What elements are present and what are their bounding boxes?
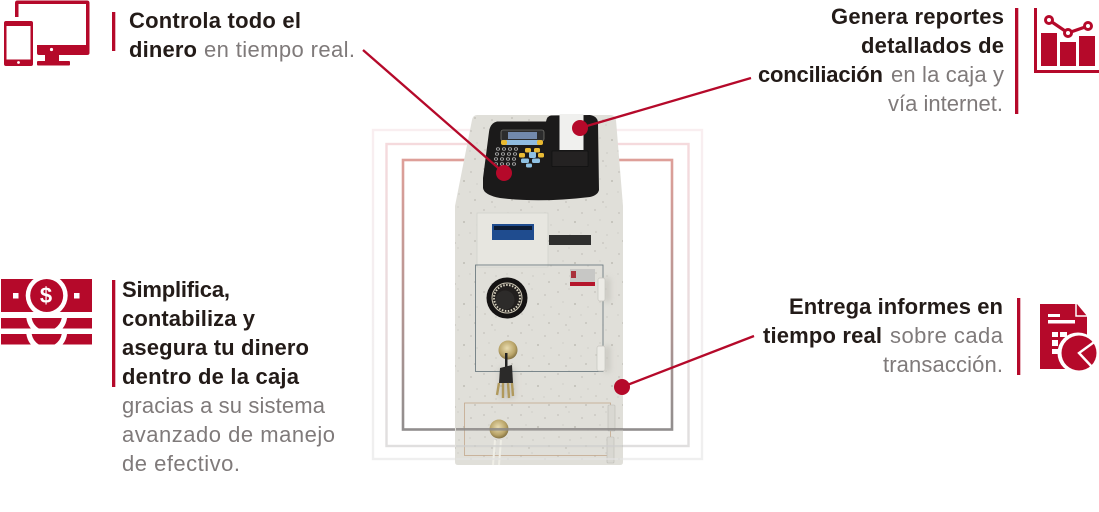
function keys [501, 140, 543, 145]
safe body [455, 115, 623, 465]
door hinges [597, 278, 605, 371]
numeric keypad [494, 148, 518, 165]
text: real-time reports: sobre cada [890, 323, 1004, 348]
decorative nested frames behind the safe [373, 130, 702, 459]
printer terminal [483, 114, 599, 200]
callout line: terminal [363, 50, 512, 181]
text: real-time reports: transacción. [883, 352, 1003, 377]
bill slot [492, 224, 534, 240]
icon: cash: $ [40, 283, 52, 308]
icon: document with pie [1040, 304, 1098, 374]
printer recess [552, 151, 588, 166]
text: cash handling: contabiliza y [122, 306, 256, 331]
terminal screen [501, 130, 544, 141]
door lock with keys [497, 340, 518, 398]
cash drawer [464, 403, 610, 456]
text: reports: vía internet. [888, 91, 1003, 116]
accent bar: cash [112, 280, 115, 387]
text: cash handling [122, 277, 335, 476]
text: reports: en la caja y [891, 62, 1004, 87]
icon: devices [4, 0, 90, 66]
text: cash handling: Simplifica, [122, 277, 230, 302]
safe door [476, 265, 603, 372]
text: reports [758, 4, 1004, 116]
frame lines crossing in front of the safe [456, 428, 623, 460]
icon: report chart [1034, 8, 1099, 73]
accent bar: reports [1015, 8, 1018, 114]
drawer hinges [607, 405, 615, 463]
text: control: Controla todo el [129, 8, 301, 33]
text: control [129, 8, 355, 62]
text: control: en tiempo real. [204, 37, 355, 62]
drawer lock with key [490, 420, 508, 465]
text: cash handling: avanzado de manejo [122, 422, 335, 447]
combination dial [486, 278, 528, 318]
accent bar: informs [1017, 298, 1020, 375]
text: cash handling: gracias a su sistema [122, 393, 326, 418]
text: real-time reports: tiempo real [763, 323, 882, 348]
receipt slot [549, 235, 591, 245]
text: reports: conciliación [758, 62, 883, 87]
text: cash handling: asegura tu dinero [122, 335, 309, 360]
icon: cash [1, 279, 92, 344]
callout line: printer [572, 78, 751, 136]
upper front panel [477, 213, 548, 267]
text: cash handling: de efectivo. [122, 451, 240, 476]
text: control: dinero [129, 37, 197, 62]
text: reports: detallados de [861, 33, 1004, 58]
soft shadows on the door [499, 278, 610, 398]
text: real-time reports: Entrega informes en [789, 294, 1003, 319]
text: cash handling: dentro de la caja [122, 364, 300, 389]
brand label [570, 269, 595, 286]
text: reports: Genera reportes [831, 4, 1004, 29]
printer paper [560, 114, 584, 150]
callout line: safe [614, 336, 754, 395]
text: real-time reports [763, 294, 1004, 377]
safe product illustration [455, 114, 623, 465]
accent bar: devices [112, 12, 115, 51]
navigation keys [519, 148, 544, 168]
